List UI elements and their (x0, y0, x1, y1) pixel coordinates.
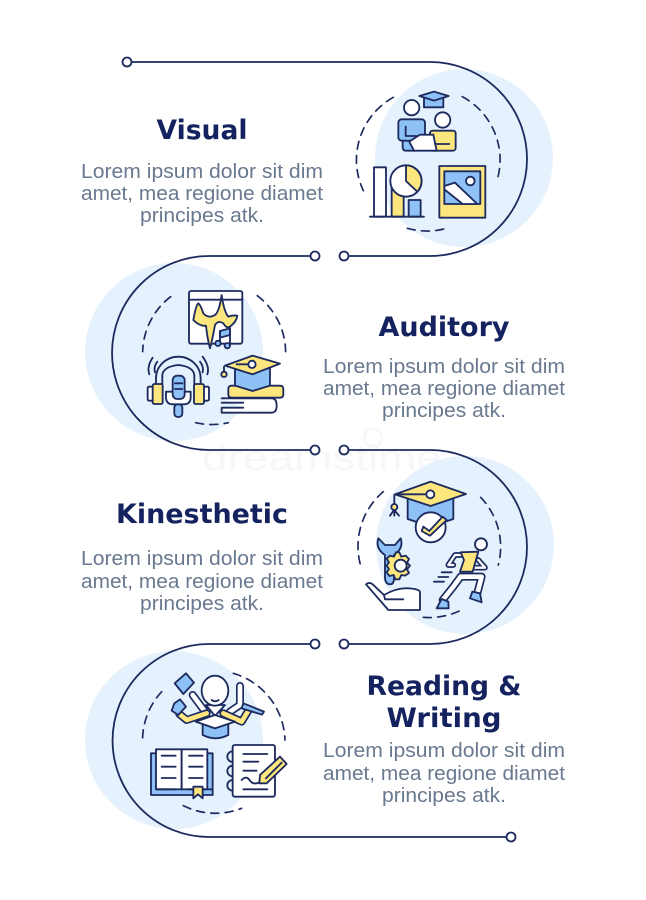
text block: Reading and Writing description: Lorem ipsum dolor sit dim (323, 740, 565, 762)
text block: Kinesthetic description: principes atk. (140, 593, 264, 615)
section: kinesthetic (81, 482, 501, 618)
watermark (202, 429, 442, 478)
background circles (85, 69, 554, 829)
section: visual (81, 92, 500, 231)
text block: Visual description: amet, mea regione diamet (81, 183, 323, 205)
text block: Visual description: principes atk. (140, 205, 264, 227)
heading: Visual: Visual (156, 115, 248, 146)
text block: Auditory description: principes atk. (382, 400, 506, 422)
heading: Reading & Writing (366, 671, 522, 734)
text block: Auditory description: amet, mea regione diamet (323, 378, 565, 400)
icon: visual learning (356, 92, 500, 231)
text block: Reading and Writing description: amet, mea regione diamet (323, 763, 565, 785)
yellow arms (179, 711, 248, 722)
heading: Reading & Writing: Writing (386, 703, 502, 734)
icon: kinesthetic learning (358, 482, 501, 618)
icon: reading and writing (143, 673, 287, 813)
section: reading and writing (143, 671, 565, 813)
text block: Kinesthetic description: amet, mea regione diamet (81, 571, 323, 593)
heading: Kinesthetic: Kinesthetic (116, 499, 288, 530)
text block: Visual description: Lorem ipsum dolor sit dim (81, 161, 323, 183)
text block: Kinesthetic description (81, 548, 323, 615)
text block: Reading and Writing description (323, 740, 565, 807)
text block: Reading and Writing description: principes atk. (382, 785, 506, 807)
text block: Auditory description: Lorem ipsum dolor sit dim (323, 356, 565, 378)
watermark: dreamstime (202, 437, 442, 478)
heading: Reading & Writing: Reading & (366, 671, 522, 702)
raised white arms (193, 686, 240, 712)
section: auditory (143, 291, 565, 425)
heading: Auditory: Auditory (378, 312, 510, 343)
text block: Auditory description (323, 356, 565, 422)
text block: Visual description (81, 161, 323, 227)
connector line (112, 58, 527, 842)
runner limbs (443, 555, 485, 600)
text block: Kinesthetic description: Lorem ipsum dolor sit dim (81, 548, 323, 570)
icon: auditory learning (143, 291, 286, 425)
